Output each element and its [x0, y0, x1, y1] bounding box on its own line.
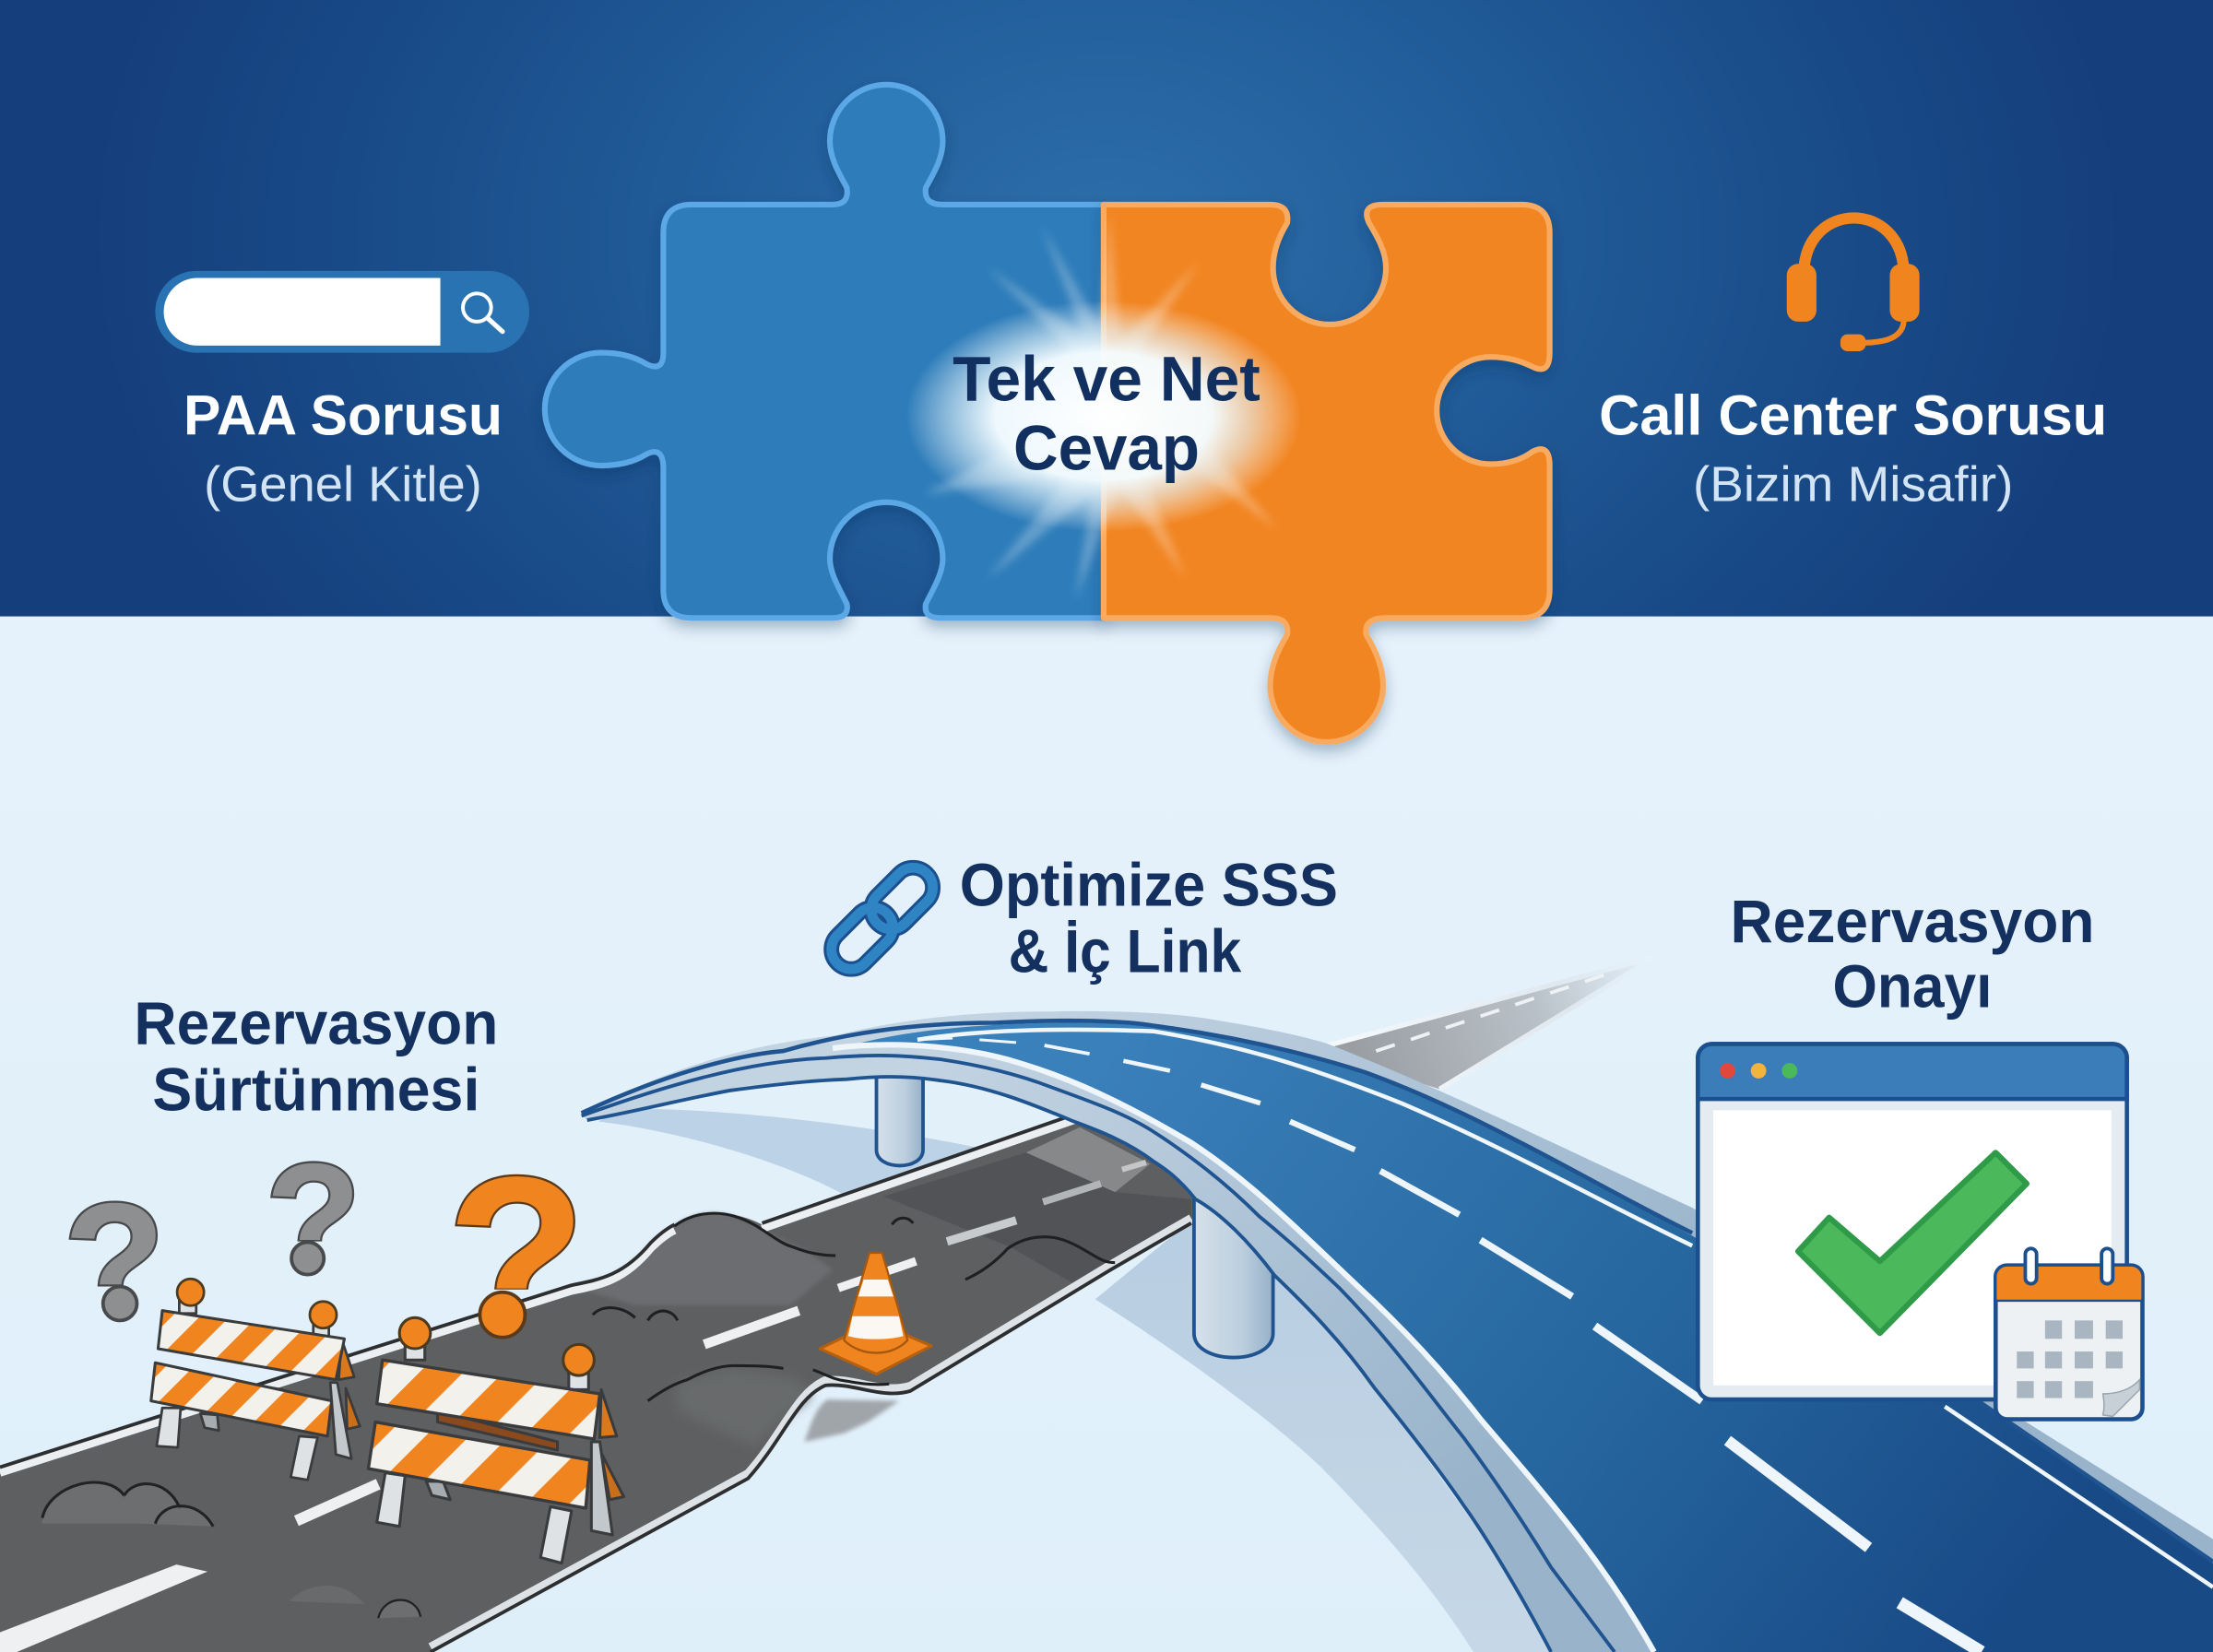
- label: Rezervasyon Onayı: Onayı: [1833, 952, 1992, 1021]
- icon: question mark orange: [455, 1174, 575, 1339]
- icon: question mark orange: ?: [446, 1129, 586, 1385]
- icon: search bar: [155, 271, 529, 353]
- pillar: back bridge column: [877, 1065, 923, 1165]
- bridge lane dashes: [923, 1038, 1982, 1652]
- road edges: [0, 1077, 1200, 1473]
- icon: question mark grey middle: ?: [266, 1130, 361, 1305]
- ground shadows of the bridge: [598, 1109, 1567, 1652]
- bridge deck: [846, 1022, 2213, 1652]
- panel: top dark blue band: [0, 0, 2213, 617]
- label: Rezervasyon Sürtünmesi: Rezervasyon: [134, 988, 498, 1056]
- label: Rezervasyon Sürtünmesi: Sürtünmesi: [152, 1055, 479, 1123]
- road mound: [572, 1213, 833, 1305]
- text: Bizim Misafir: (Bizim Misafir): [1693, 457, 2013, 512]
- bridge guard rail: [582, 1011, 2213, 1652]
- icon: road barricade left: [151, 1279, 360, 1480]
- label: Tek ve Net Cevap: [953, 344, 1260, 484]
- heading: Call Center Sorusu: Call Center Sorusu: [1599, 384, 2107, 446]
- panel: lower light background: [0, 617, 2213, 1652]
- road rough under bump: [804, 1399, 899, 1442]
- puzzle: two interlocking pieces: [545, 85, 1550, 742]
- icon: question mark grey left: [68, 1200, 158, 1322]
- icon: headset: [1787, 218, 1920, 351]
- puzzle piece: orange: [1104, 205, 1550, 742]
- label: Optimize SSS ve İç Link: Optimize SSS: [960, 850, 1338, 918]
- text: Genel Kitle: (Genel Kitle): [204, 457, 482, 512]
- road lighter patch and bridge shadow: [1026, 1127, 1150, 1192]
- road: broken grey asphalt: [0, 1071, 1242, 1652]
- label: Tek ve Net Cevap: Tek ve Net: [953, 344, 1260, 415]
- road rocks: [42, 1482, 420, 1618]
- label: Optimize SSS ve İç Link: & İç Link: [1009, 916, 1242, 985]
- road cracks: [593, 1213, 1115, 1401]
- icon: chain link: [823, 859, 941, 977]
- pillar: front bridge column: [1194, 1178, 1273, 1358]
- icon: green check mark: [1798, 1152, 2027, 1333]
- road lane dashes: [0, 1162, 1146, 1652]
- bridge guard lower outline: [587, 1077, 1551, 1652]
- label: Rezervasyon Onayı: Rezervasyon: [1731, 887, 2094, 955]
- icon: question mark grey middle: [270, 1161, 354, 1276]
- bridge: curved blue highway: [582, 1011, 2213, 1652]
- label: Rezervasyon Sürtünmesi: [134, 988, 498, 1123]
- bridge navy lines: [582, 1056, 1615, 1652]
- icon: traffic cone: [820, 1253, 931, 1375]
- panel: browser window: [1698, 1044, 2127, 1399]
- heading: PAA Sorusu: PAA Sorusu: [183, 384, 503, 446]
- label: Tek ve Net Cevap: Cevap: [1013, 413, 1200, 484]
- far road behind the bridge: [1312, 958, 1651, 1089]
- label: Optimize SSS ve İç Link: [960, 850, 1338, 985]
- label: Rezervasyon Onayı: [1731, 887, 2094, 1021]
- icon: calendar: [1995, 1248, 2142, 1419]
- puzzle piece: blue: [545, 85, 1104, 618]
- bridge white edge lines: [917, 1030, 2213, 1587]
- icon: road barricade right: [368, 1317, 624, 1564]
- icon: question mark grey left: ?: [64, 1170, 165, 1355]
- icon: central light burst: [906, 212, 1301, 599]
